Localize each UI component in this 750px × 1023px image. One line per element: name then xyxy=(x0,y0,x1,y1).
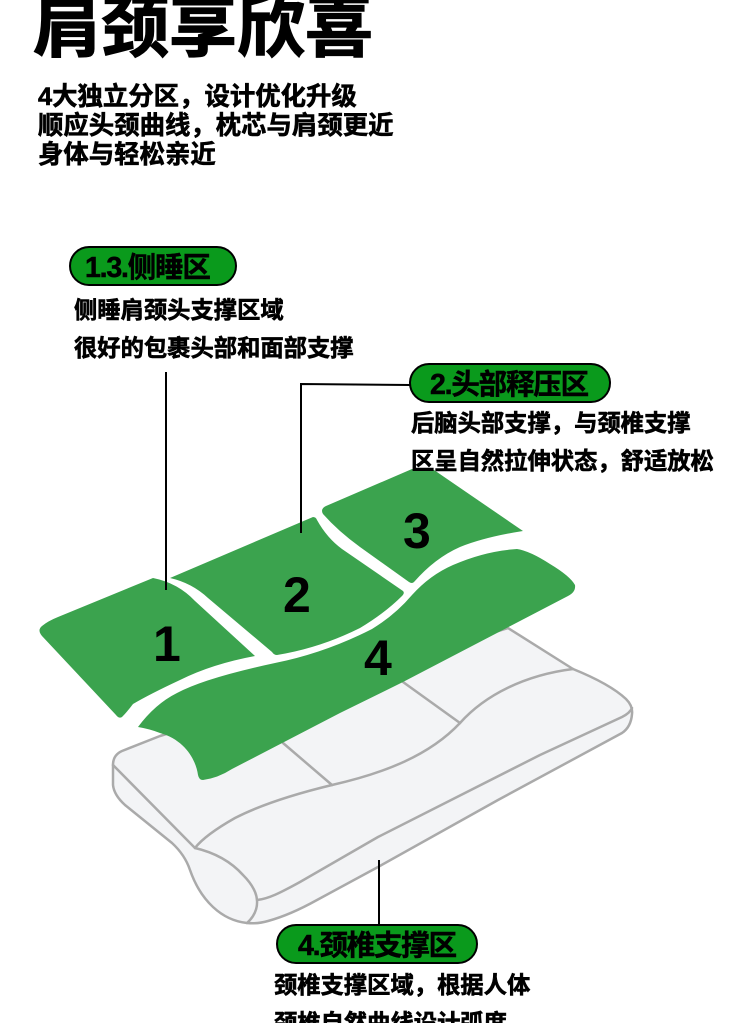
leader line: zone 4 xyxy=(378,860,380,926)
description: head zone xyxy=(411,410,714,474)
green zone 1 xyxy=(40,578,255,718)
green zone 2 xyxy=(170,517,404,655)
description: head zone: 后脑头部支撑，与颈椎支撑 xyxy=(411,410,691,436)
label: cervical zone: 4.颈椎支撑区 xyxy=(298,930,456,962)
description: side sleep zone: 很好的包裹头部和面部支撑 xyxy=(74,335,354,361)
description: side sleep zone: 侧睡肩颈头支撑区域 xyxy=(74,297,284,323)
intro text: 顺应头颈曲线，枕芯与肩颈更近 xyxy=(38,112,393,140)
zone numbers xyxy=(153,503,431,686)
intro text: 4大独立分区，设计优化升级 xyxy=(38,83,357,111)
number 3: 3 xyxy=(403,503,431,559)
label: cervical zone xyxy=(276,924,478,964)
number 2: 2 xyxy=(283,567,311,623)
green zone 3 xyxy=(322,469,523,583)
description: head zone: 区呈自然拉伸状态，舒适放松 xyxy=(411,448,714,474)
description: cervical zone xyxy=(274,972,530,1023)
pillow base xyxy=(113,628,632,923)
description: side sleep zone xyxy=(74,297,354,361)
leader line: zone 1 xyxy=(165,372,167,590)
intro text: 身体与轻松亲近 xyxy=(38,141,216,169)
number 1: 1 xyxy=(153,616,181,672)
number 4: 4 xyxy=(364,630,392,686)
description: cervical zone: 颈椎支撑区域，根据人体 xyxy=(274,972,530,998)
label: side sleep zone: 1.3.侧睡区 xyxy=(85,252,210,284)
label: head zone xyxy=(409,363,611,403)
green zone 4 xyxy=(138,549,575,780)
leader line: zone 2 xyxy=(301,384,411,533)
intro text xyxy=(38,82,394,169)
label: head zone: 2.头部释压区 xyxy=(430,369,588,401)
label: side sleep zone xyxy=(69,246,237,286)
